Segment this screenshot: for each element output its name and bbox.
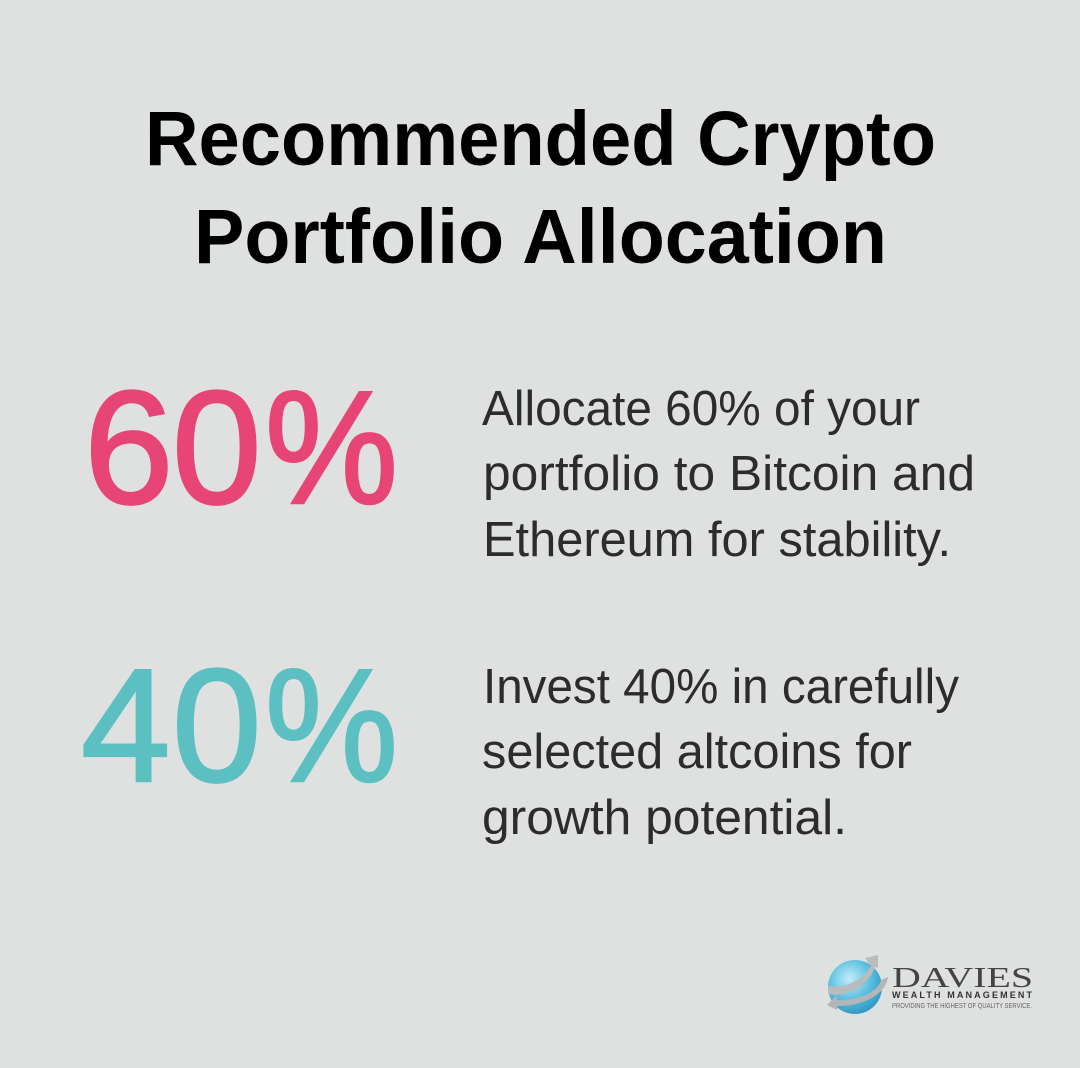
60% description — [482, 382, 975, 567]
logo subtitle: WEALTH MANAGEMENT — [892, 990, 1032, 1000]
title — [145, 96, 936, 280]
title: Portfolio Allocation — [194, 194, 887, 280]
stat: 40% — [81, 636, 959, 845]
40% description — [482, 660, 959, 845]
60% figure — [84, 358, 398, 538]
logo: Davies Wealth Management — [827, 955, 1033, 1014]
40% description: growth potential. — [482, 791, 847, 845]
60% figure: 60 — [84, 358, 262, 538]
40% figure: 40 — [81, 636, 262, 816]
60% description: Allocate 60% of your — [482, 382, 920, 436]
60% description: portfolio to Bitcoin and — [483, 447, 975, 501]
40% figure — [81, 636, 398, 816]
logo wordmark: DAVIES — [892, 962, 1033, 994]
40% description: selected altcoins for — [482, 725, 912, 779]
logo tagline: PROVIDING THE HIGHEST OF QUALITY SERVICE. — [892, 1003, 1032, 1010]
60% description: Ethereum for stability. — [483, 513, 951, 567]
60% figure: % — [265, 358, 398, 538]
icon: globe with arrows — [827, 955, 888, 1014]
40% figure: % — [265, 636, 398, 816]
title: Recommended Crypto — [145, 96, 936, 182]
40% description: Invest 40% in carefully — [483, 660, 959, 714]
stat: 60% — [84, 358, 975, 567]
